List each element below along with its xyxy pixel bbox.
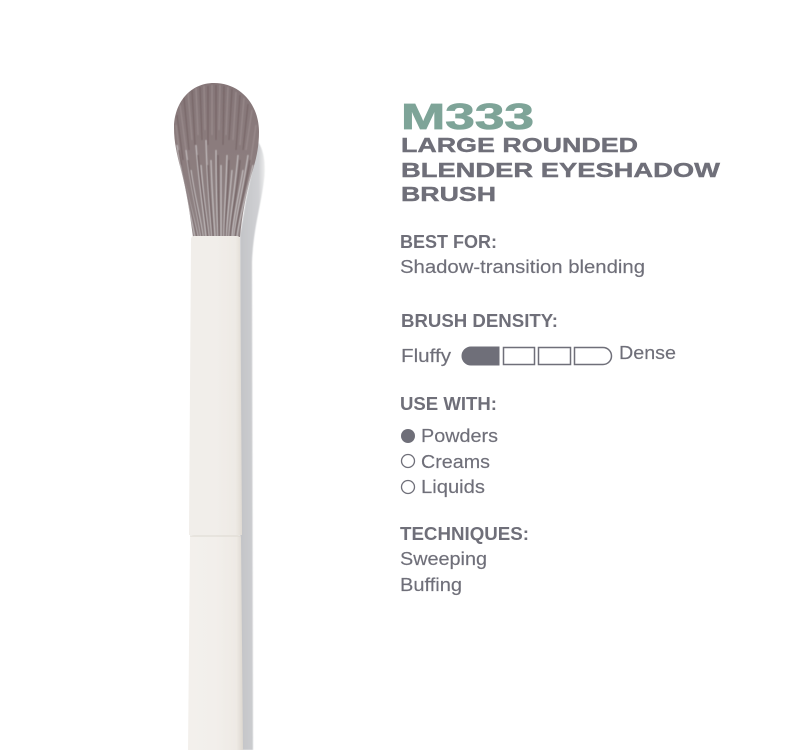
title: product code: M333	[401, 96, 534, 137]
option: creams: Creams	[421, 451, 490, 472]
section: techniques: Sweeping	[400, 548, 487, 569]
heading: product name: LARGE ROUNDED	[401, 135, 638, 157]
heading: product name: BLENDER EYESHADOW	[401, 160, 720, 182]
heading: product name	[401, 135, 720, 206]
brush shadow	[240, 142, 265, 750]
icon: makeup brush	[170, 80, 265, 750]
section: brush density: BRUSH DENSITY:	[401, 310, 558, 331]
section: brush density	[401, 310, 676, 366]
brush ferrule	[189, 236, 242, 535]
brush handle	[188, 535, 243, 750]
option: powders selected: Powders	[421, 425, 498, 446]
section: techniques: TECHNIQUES:	[400, 523, 529, 544]
section: best for	[400, 231, 645, 277]
section: use with: USE WITH:	[400, 393, 497, 414]
section: best for: Shadow-transition blending	[400, 256, 645, 277]
section: brush density: Dense	[619, 342, 676, 363]
section: techniques: Buffing	[400, 574, 462, 595]
section: techniques	[400, 523, 529, 595]
heading: product name: BRUSH	[401, 184, 496, 206]
section: use with	[400, 393, 498, 497]
density scale	[462, 347, 612, 365]
option: liquids: Liquids	[421, 476, 485, 497]
section: best for: BEST FOR:	[400, 231, 497, 252]
brush bristles	[174, 83, 259, 237]
section: brush density: Fluffy	[401, 345, 452, 366]
